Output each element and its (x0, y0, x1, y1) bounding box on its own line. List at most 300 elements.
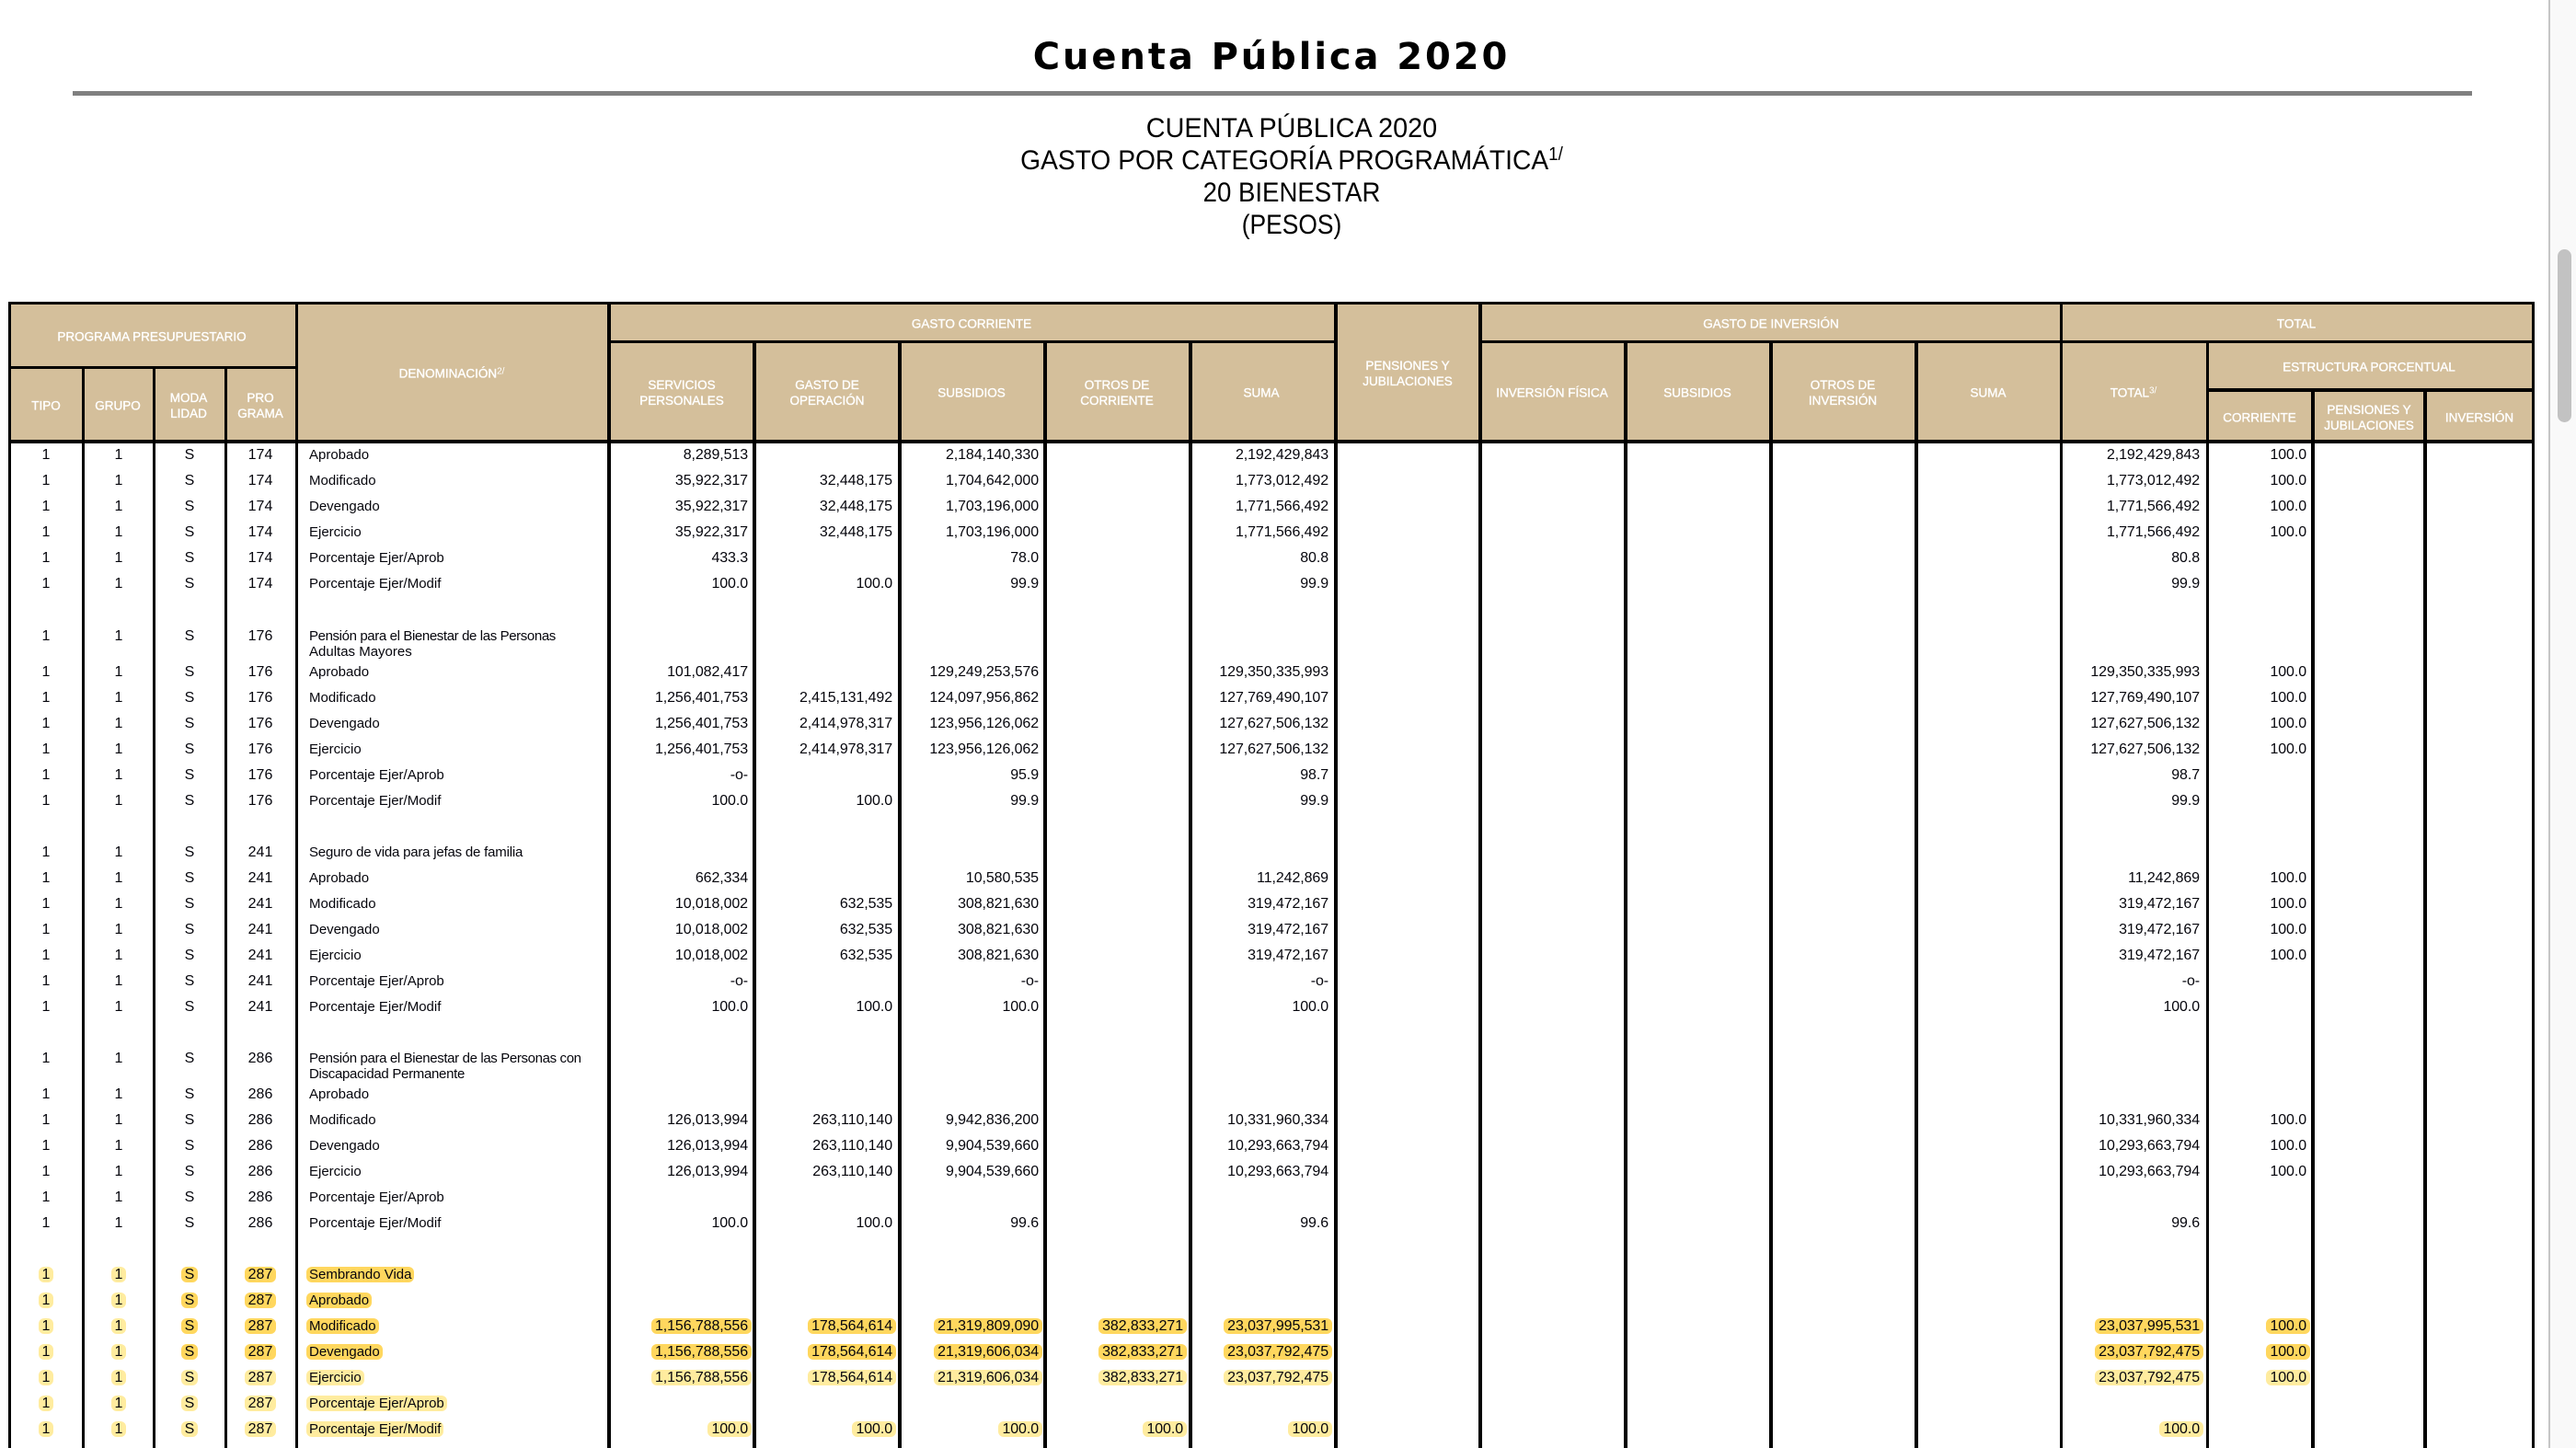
row: 287 modificado: 23,037,995,531 (1227, 1318, 1328, 1334)
row: 176 modificado: Modificado (309, 690, 376, 706)
row: 241 devengado: 10,018,002 (675, 922, 748, 937)
header: pensiones y jubilaciones (1363, 359, 1453, 388)
row: 176 modificado: 124,097,956,862 (929, 690, 1039, 706)
row: 176 ejercicio: 127,627,506,132 (1219, 741, 1328, 757)
row: 287 modificado: 21,319,809,090 (937, 1318, 1039, 1334)
row: 176 porcentaje ejer/aprob (42, 767, 2200, 783)
row: 241 ejercicio: 319,472,167 (2119, 948, 2200, 963)
header: subsidios inversion: SUBSIDIOS (1663, 386, 1731, 399)
row: 286 ejercicio (0, 1159, 2548, 1185)
data rows: programa 176: Adultas Mayores (309, 644, 412, 660)
row: 176 ejercicio: 1 (115, 741, 122, 757)
row: 241 devengado: S (185, 922, 194, 937)
row: 286 modificado: 100.0 (2270, 1112, 2306, 1128)
row: 287 porcentaje ejer/modif (0, 1417, 2548, 1442)
data rows: programa 176 (42, 628, 2306, 809)
row: 287 devengado: 1,156,788,556 (655, 1344, 748, 1360)
header: otros de inversion: INVERSIÓN (1809, 394, 1877, 408)
row: 241 aprobado (42, 870, 2306, 886)
row: 176 porcentaje ejer/modif: 100.0 (711, 793, 748, 809)
row: 286 porcentaje ejer/aprob: Porcentaje Ejer/Aprob (309, 1189, 444, 1205)
row: 241 modificado: 319,472,167 (2119, 896, 2200, 912)
row: 176 aprobado: 101,082,417 (667, 664, 748, 680)
row: 241 ejercicio: 100.0 (2270, 948, 2306, 963)
row: 176 porcentaje ejer/aprob: Porcentaje Ejer/Aprob (309, 767, 444, 783)
row: 287 devengado: 178,564,614 (811, 1344, 892, 1360)
row: 287 porcentaje ejer/modif: 100.0 (711, 1421, 748, 1437)
row: 287 ejercicio: 287 (248, 1370, 272, 1385)
row: 176 modificado: S (185, 690, 194, 706)
row: 286 ejercicio: 126,013,994 (667, 1164, 748, 1179)
row: 287 sembrando vida: 1 (42, 1267, 50, 1282)
row: 176 porcentaje ejer/modif: Porcentaje Ejer/Modif (309, 793, 441, 809)
row: 286 devengado: Devengado (309, 1138, 380, 1154)
row: 286 porcentaje ejer/aprob: S (185, 1189, 194, 1205)
row: 174 modificado: Modificado (309, 473, 376, 488)
header: gasto de operacion: GASTO DE (795, 378, 859, 392)
row: 286 porcentaje ejer/modif: 286 (248, 1215, 272, 1231)
row: 176 devengado: 2,414,978,317 (799, 716, 892, 731)
row: 176 porcentaje ejer/modif: S (185, 793, 194, 809)
row: 174 devengado: 1,771,566,492 (2107, 499, 2200, 514)
row: 287 modificado: 178,564,614 (811, 1318, 892, 1334)
row: 286 aprobado: 1 (115, 1086, 122, 1102)
row: 241 porcentaje ejer/aprob: 1 (115, 973, 122, 989)
row: 176 aprobado: 100.0 (2270, 664, 2306, 680)
row: 287 ejercicio: 1 (115, 1370, 122, 1385)
row: 287 porcentaje ejer/aprob: 1 (42, 1396, 50, 1411)
row: 174 modificado: 1,773,012,492 (1236, 473, 1328, 488)
row: 287 ejercicio: Ejercicio (309, 1370, 362, 1385)
row: 174 aprobado: 174 (248, 447, 272, 463)
row: 287 ejercicio: 100.0 (2270, 1370, 2306, 1385)
row: 286 porcentaje ejer/aprob: 1 (42, 1189, 50, 1205)
row: 241 aprobado: Aprobado (309, 870, 369, 886)
row: 286 devengado (42, 1138, 2306, 1154)
row: 176 porcentaje ejer/aprob: 95.9 (1010, 767, 1039, 783)
row: 241 devengado: 308,821,630 (958, 922, 1039, 937)
row: 287 modificado: 100.0 (2270, 1318, 2306, 1334)
row: 174 devengado (42, 499, 2306, 514)
row: 241 ejercicio (42, 948, 2306, 963)
header: estructura pensiones (2324, 403, 2414, 432)
row: 174 aprobado: 8,289,513 (684, 447, 748, 463)
row: 287 ejercicio: 382,833,271 (1102, 1370, 1183, 1385)
data rows: programa 286: Discapacidad Permanente (309, 1066, 465, 1082)
subtitle block: 20 BIENESTAR (1203, 178, 1380, 208)
row: 174 ejercicio: 1 (115, 524, 122, 540)
row: 241 ejercicio: 241 (248, 948, 272, 963)
header: pensiones y jubilaciones: JUBILACIONES (1363, 374, 1453, 388)
row: 286 ejercicio: 10,293,663,794 (1227, 1164, 1328, 1179)
row: 174 aprobado: 2,192,429,843 (2107, 447, 2200, 463)
row: 174 devengado: 32,448,175 (820, 499, 892, 514)
row: 241 denominacion: S (185, 845, 194, 860)
row: 286 aprobado: Aprobado (309, 1086, 369, 1102)
row: 241 ejercicio: 319,472,167 (1248, 948, 1328, 963)
row: 286 denominacion: 1 (42, 1051, 50, 1066)
row: 241 porcentaje ejer/modif: 100.0 (711, 999, 748, 1015)
row: 286 devengado: 1 (42, 1138, 50, 1154)
row: 287 sembrando vida: S (185, 1267, 194, 1282)
row: 286 modificado: 263,110,140 (812, 1112, 892, 1128)
row: 241 aprobado: 241 (248, 870, 272, 886)
row: 174 porcentaje ejer/modif: 174 (248, 576, 272, 592)
row: 174 aprobado: 2,192,429,843 (1236, 447, 1328, 463)
header: pensiones y jubilaciones: PENSIONES Y (1365, 359, 1450, 373)
header: programa: GRAMA (237, 407, 283, 420)
scrollbar thumb (2558, 249, 2571, 422)
row: 286 porcentaje ejer/aprob (0, 1185, 2548, 1211)
row: 287 ejercicio: 21,319,606,034 (937, 1370, 1039, 1385)
row: 241 aprobado: 1 (42, 870, 50, 886)
row: 286 porcentaje ejer/modif: Porcentaje Ejer/Modif (309, 1215, 441, 1231)
row: 287 sembrando vida: 1 (115, 1267, 122, 1282)
row: 241 porcentaje ejer/modif: 100.0 (1002, 999, 1039, 1015)
row: 174 devengado: Devengado (309, 499, 380, 514)
row: 174 ejercicio: 35,922,317 (675, 524, 748, 540)
row: 241 aprobado: 662,334 (696, 870, 748, 886)
row: 241 porcentaje ejer/modif: 100.0 (1292, 999, 1328, 1015)
header: total group: TOTAL (2277, 316, 2316, 331)
row: 241 porcentaje ejer/aprob: 1 (42, 973, 50, 989)
row: 174 devengado: 1 (115, 499, 122, 514)
row: 286 porcentaje ejer/modif: 1 (42, 1215, 50, 1231)
row: 176 denominacion: S (185, 628, 194, 644)
row: 287 modificado: Modificado (309, 1318, 376, 1334)
row: 176 porcentaje ejer/aprob: 98.7 (1300, 767, 1328, 783)
row: 241 aprobado: 1 (115, 870, 122, 886)
subtitle block: (PESOS) (1242, 210, 1341, 240)
row: 174 porcentaje ejer/aprob: 78.0 (1010, 550, 1039, 566)
row: 287 aprobado: Aprobado (309, 1293, 369, 1308)
row: 174 devengado: 35,922,317 (675, 499, 748, 514)
row: 176 modificado: 127,769,490,107 (2090, 690, 2200, 706)
header: modalidad: LIDAD (170, 407, 207, 420)
header: grupo: GRUPO (95, 399, 141, 412)
row: 176 modificado: 1 (115, 690, 122, 706)
data rows: programa 287 highlighted (0, 1262, 2548, 1442)
row: 286 devengado: 9,904,539,660 (946, 1138, 1039, 1154)
row: 241 porcentaje ejer/modif: 241 (248, 999, 272, 1015)
row: 176 modificado (42, 690, 2306, 706)
row: 241 modificado: Modificado (309, 896, 376, 912)
row: 176 porcentaje ejer/modif: 100.0 (856, 793, 892, 809)
header: programa: PRO (247, 391, 274, 405)
row: 174 devengado: 100.0 (2270, 499, 2306, 514)
row: 241 porcentaje ejer/aprob: -o- (1021, 973, 1039, 989)
row: 241 denominacion: 1 (115, 845, 122, 860)
row: 287 aprobado: S (185, 1293, 194, 1308)
row: 287 porcentaje ejer/aprob: S (185, 1396, 194, 1411)
row: 174 ejercicio: 174 (248, 524, 272, 540)
row: 174 porcentaje ejer/aprob (42, 550, 2200, 566)
row: 176 porcentaje ejer/modif: 99.9 (2171, 793, 2200, 809)
row: 176 ejercicio: 100.0 (2270, 741, 2306, 757)
row: 286 ejercicio: 10,293,663,794 (2099, 1164, 2200, 1179)
row: 286 ejercicio: Ejercicio (309, 1164, 362, 1179)
header: suma corriente: SUMA (1243, 386, 1280, 399)
row: 176 modificado: 1,256,401,753 (655, 690, 748, 706)
row: 241 porcentaje ejer/aprob: S (185, 973, 194, 989)
row: 287 devengado: 23,037,792,475 (2099, 1344, 2200, 1360)
row: 241 porcentaje ejer/aprob: -o- (730, 973, 748, 989)
row: 241 porcentaje ejer/aprob: 241 (248, 973, 272, 989)
row: 286 denominacion: S (185, 1051, 194, 1066)
row: 174 porcentaje ejer/modif (42, 576, 2200, 592)
row: 287 porcentaje ejer/modif: 100.0 (1002, 1421, 1039, 1437)
header: suma inversion: SUMA (1970, 386, 2007, 399)
row: 286 devengado: 10,293,663,794 (2099, 1138, 2200, 1154)
row: 176 porcentaje ejer/aprob: 1 (42, 767, 50, 783)
row: 241 ejercicio: 308,821,630 (958, 948, 1039, 963)
row: 176 devengado: 127,627,506,132 (1219, 716, 1328, 731)
row: 241 modificado: 1 (42, 896, 50, 912)
row: 286 modificado: 286 (248, 1112, 272, 1128)
header: estructura inversion: INVERSIÓN (2445, 410, 2513, 425)
row: 174 porcentaje ejer/aprob: 1 (42, 550, 50, 566)
row: 176 modificado: 100.0 (2270, 690, 2306, 706)
row: 241 denominacion: Seguro de vida para jefas de familia (309, 845, 523, 860)
row: 241 devengado: Devengado (309, 922, 380, 937)
row: 241 aprobado: 11,242,869 (1257, 870, 1328, 886)
row: 176 porcentaje ejer/aprob: 176 (248, 767, 272, 783)
row: 286 ejercicio: 1 (42, 1164, 50, 1179)
row: 241 porcentaje ejer/aprob: -o- (1311, 973, 1328, 989)
row: 174 porcentaje ejer/modif: 1 (42, 576, 50, 592)
row: 176 aprobado: 1 (42, 664, 50, 680)
row: 176 devengado: 127,627,506,132 (2090, 716, 2200, 731)
row: 174 devengado: S (185, 499, 194, 514)
row: 241 devengado: 319,472,167 (2119, 922, 2200, 937)
row: 286 devengado: 100.0 (2270, 1138, 2306, 1154)
row: 176 ejercicio: S (185, 741, 194, 757)
row: 287 modificado: 382,833,271 (1102, 1318, 1183, 1334)
row: 174 aprobado: 100.0 (2270, 447, 2306, 463)
row: 176 denominacion: 1 (115, 628, 122, 644)
row: 174 aprobado: S (185, 447, 194, 463)
row: 176 devengado: 1,256,401,753 (655, 716, 748, 731)
row: 287 porcentaje ejer/modif: 100.0 (1146, 1421, 1183, 1437)
subtitle block: GASTO POR CATEGORÍA PROGRAMÁTICA1/ (1020, 144, 1563, 176)
row: 174 aprobado (42, 447, 2306, 463)
row: 176 porcentaje ejer/modif: 1 (42, 793, 50, 809)
row: 287 porcentaje ejer/modif: 1 (115, 1421, 122, 1437)
row: 174 ejercicio: Ejercicio (309, 524, 362, 540)
row: 287 ejercicio (0, 1365, 2548, 1391)
row: 176 porcentaje ejer/aprob: S (185, 767, 194, 783)
header: gasto de operacion (789, 378, 865, 408)
row: 241 modificado: 319,472,167 (1248, 896, 1328, 912)
row: 287 devengado: 100.0 (2270, 1344, 2306, 1360)
row: 287 ejercicio: S (185, 1370, 194, 1385)
row: 287 aprobado (0, 1288, 2548, 1314)
row: 176 porcentaje ejer/modif: 176 (248, 793, 272, 809)
row: 287 modificado: 1 (42, 1318, 50, 1334)
row: 241 devengado (42, 922, 2306, 937)
row: 286 aprobado: S (185, 1086, 194, 1102)
row: 287 devengado: 23,037,792,475 (1227, 1344, 1328, 1360)
row: 287 modificado: S (185, 1318, 194, 1334)
row: 286 modificado: 10,331,960,334 (1227, 1112, 1328, 1128)
row: 286 modificado: 1 (42, 1112, 50, 1128)
subtitle block (1020, 113, 1563, 240)
row: 286 porcentaje ejer/modif: 1 (115, 1215, 122, 1231)
row: 174 porcentaje ejer/aprob: 174 (248, 550, 272, 566)
row: 286 porcentaje ejer/modif: 99.6 (1300, 1215, 1328, 1231)
row: 287 modificado: 23,037,995,531 (2099, 1318, 2200, 1334)
row: 174 porcentaje ejer/modif: Porcentaje Ejer/Modif (309, 576, 441, 592)
row: 174 porcentaje ejer/modif: 1 (115, 576, 122, 592)
row: 174 modificado: 1 (42, 473, 50, 488)
header: estructura pensiones: PENSIONES Y (2327, 403, 2411, 417)
row: 176 porcentaje ejer/modif: 99.9 (1300, 793, 1328, 809)
row: 286 porcentaje ejer/aprob: 1 (115, 1189, 122, 1205)
row: 174 ejercicio: 1,771,566,492 (2107, 524, 2200, 540)
row: 287 devengado (0, 1339, 2548, 1365)
row: 287 porcentaje ejer/aprob (0, 1391, 2548, 1417)
row: 286 porcentaje ejer/modif: 100.0 (711, 1215, 748, 1231)
row: 176 aprobado: 129,350,335,993 (2090, 664, 2200, 680)
row: 174 porcentaje ejer/modif: 100.0 (856, 576, 892, 592)
row: 286 ejercicio: 100.0 (2270, 1164, 2306, 1179)
row: 176 porcentaje ejer/aprob: 1 (115, 767, 122, 783)
row: 287 devengado: 1 (42, 1344, 50, 1360)
row: 287 ejercicio: 23,037,792,475 (2099, 1370, 2200, 1385)
row: 286 ejercicio: 263,110,140 (812, 1164, 892, 1179)
row: 286 porcentaje ejer/modif: S (185, 1215, 194, 1231)
header: denominacion: DENOMINACIÓN2/ (399, 366, 504, 381)
row: 287 porcentaje ejer/modif: S (185, 1421, 194, 1437)
row: 174 porcentaje ejer/modif: S (185, 576, 194, 592)
header: servicios personales (639, 378, 724, 408)
row: 287 porcentaje ejer/modif: Porcentaje Ejer/Modif (309, 1421, 441, 1437)
row: 287 sembrando vida: 287 (248, 1267, 272, 1282)
row: 241 devengado: 1 (42, 922, 50, 937)
row: 176 devengado: S (185, 716, 194, 731)
row: 287 ejercicio: 1 (42, 1370, 50, 1385)
row: 174 modificado: 174 (248, 473, 272, 488)
row: 286 denominacion (42, 1051, 581, 1082)
row: 176 aprobado: 176 (248, 664, 272, 680)
header: gasto de inversion: GASTO DE INVERSIÓN (1703, 316, 1839, 331)
row: 287 porcentaje ejer/aprob: Porcentaje Ejer/Aprob (309, 1396, 444, 1411)
row: 174 porcentaje ejer/aprob: S (185, 550, 194, 566)
row: 241 modificado: 241 (248, 896, 272, 912)
row: 174 devengado: 1,703,196,000 (946, 499, 1039, 514)
row: 176 denominacion: Pensión para el Bienestar de las Personas (309, 628, 556, 644)
row: 174 aprobado: 1 (115, 447, 122, 463)
row: 176 denominacion (42, 628, 556, 660)
row: 286 denominacion: 286 (248, 1051, 272, 1066)
row: 176 devengado: 123,956,126,062 (929, 716, 1039, 731)
row: 286 modificado: Modificado (309, 1112, 376, 1128)
row: 241 modificado: S (185, 896, 194, 912)
row: 176 aprobado: S (185, 664, 194, 680)
row: 286 modificado (42, 1112, 2306, 1128)
row: 286 aprobado: 286 (248, 1086, 272, 1102)
row: 176 ejercicio: 176 (248, 741, 272, 757)
row: 241 porcentaje ejer/modif: 100.0 (856, 999, 892, 1015)
row: 176 devengado: 1 (42, 716, 50, 731)
header: otros de corriente (1080, 378, 1154, 408)
row: 287 porcentaje ejer/aprob: 1 (115, 1396, 122, 1411)
row: 176 aprobado: 1 (115, 664, 122, 680)
subtitle block: CUENTA PÚBLICA 2020 (1146, 113, 1437, 144)
row: 286 aprobado: 1 (42, 1086, 50, 1102)
row: 176 aprobado (42, 664, 2306, 680)
row: 286 devengado: 1 (115, 1138, 122, 1154)
row: 287 sembrando vida: Sembrando Vida (309, 1267, 411, 1282)
table header labels (31, 316, 2513, 432)
row: 286 ejercicio: 286 (248, 1164, 272, 1179)
row: 287 aprobado: 1 (115, 1293, 122, 1308)
row: 241 devengado: 1 (115, 922, 122, 937)
row: 174 ejercicio: S (185, 524, 194, 540)
row: 241 porcentaje ejer/modif: Porcentaje Ejer/Modif (309, 999, 441, 1015)
row: 241 porcentaje ejer/aprob (42, 973, 2200, 989)
row: 241 porcentaje ejer/modif: 1 (42, 999, 50, 1015)
row: 176 devengado (42, 716, 2306, 731)
row: 286 denominacion: Pensión para el Bienestar de las Personas con (309, 1051, 581, 1066)
row: 174 porcentaje ejer/modif: 99.9 (2171, 576, 2200, 592)
row: 287 porcentaje ejer/modif: 1 (42, 1421, 50, 1437)
row: 287 porcentaje ejer/modif: 287 (248, 1421, 272, 1437)
row: 241 porcentaje ejer/modif: S (185, 999, 194, 1015)
row: 241 ejercicio: 10,018,002 (675, 948, 748, 963)
row: 287 devengado: 287 (248, 1344, 272, 1360)
header: estructura porcentual: ESTRUCTURA PORCENTUAL (2283, 361, 2455, 373)
row: 286 porcentaje ejer/modif: 100.0 (856, 1215, 892, 1231)
row: 241 modificado: 10,018,002 (675, 896, 748, 912)
row: 174 aprobado: 2,184,140,330 (946, 447, 1039, 463)
header: estructura pensiones: JUBILACIONES (2324, 419, 2414, 432)
header: gasto corriente: GASTO CORRIENTE (912, 316, 1031, 331)
row: 241 ejercicio: 1 (42, 948, 50, 963)
row: 176 porcentaje ejer/modif (42, 793, 2200, 809)
row: 174 modificado: 1,704,642,000 (946, 473, 1039, 488)
row: 174 modificado: 35,922,317 (675, 473, 748, 488)
row: 176 denominacion: 1 (42, 628, 50, 644)
row: 286 ejercicio: S (185, 1164, 194, 1179)
row: 174 porcentaje ejer/aprob: 80.8 (2171, 550, 2200, 566)
row: 174 ejercicio: 1,703,196,000 (946, 524, 1039, 540)
row: 287 ejercicio: 23,037,792,475 (1227, 1370, 1328, 1385)
header: modalidad: MODA (170, 391, 207, 405)
row: 176 ejercicio: Ejercicio (309, 741, 362, 757)
row: 176 ejercicio: 1,256,401,753 (655, 741, 748, 757)
header: programa (237, 391, 283, 420)
row: 176 ejercicio: 127,627,506,132 (2090, 741, 2200, 757)
row: 241 porcentaje ejer/aprob: Porcentaje Ejer/Aprob (309, 973, 444, 989)
row: 241 modificado: 100.0 (2270, 896, 2306, 912)
row: 287 aprobado: 287 (248, 1293, 272, 1308)
row: 286 ejercicio: 1 (115, 1164, 122, 1179)
row: 174 aprobado: 1 (42, 447, 50, 463)
row: 287 devengado: Devengado (309, 1344, 380, 1360)
row: 174 modificado: 32,448,175 (820, 473, 892, 488)
row: 286 porcentaje ejer/modif: 99.6 (2171, 1215, 2200, 1231)
row: 287 porcentaje ejer/modif: 100.0 (856, 1421, 892, 1437)
header: otros de inversion: OTROS DE (1811, 378, 1875, 392)
row: 287 devengado: 382,833,271 (1102, 1344, 1183, 1360)
row: 241 porcentaje ejer/aprob: -o- (2182, 973, 2200, 989)
row: 287 ejercicio: 1,156,788,556 (655, 1370, 748, 1385)
row: 174 ejercicio: 1 (42, 524, 50, 540)
row: 241 aprobado: 100.0 (2270, 870, 2306, 886)
row: 287 modificado: 1 (115, 1318, 122, 1334)
row: 286 denominacion: 1 (115, 1051, 122, 1066)
